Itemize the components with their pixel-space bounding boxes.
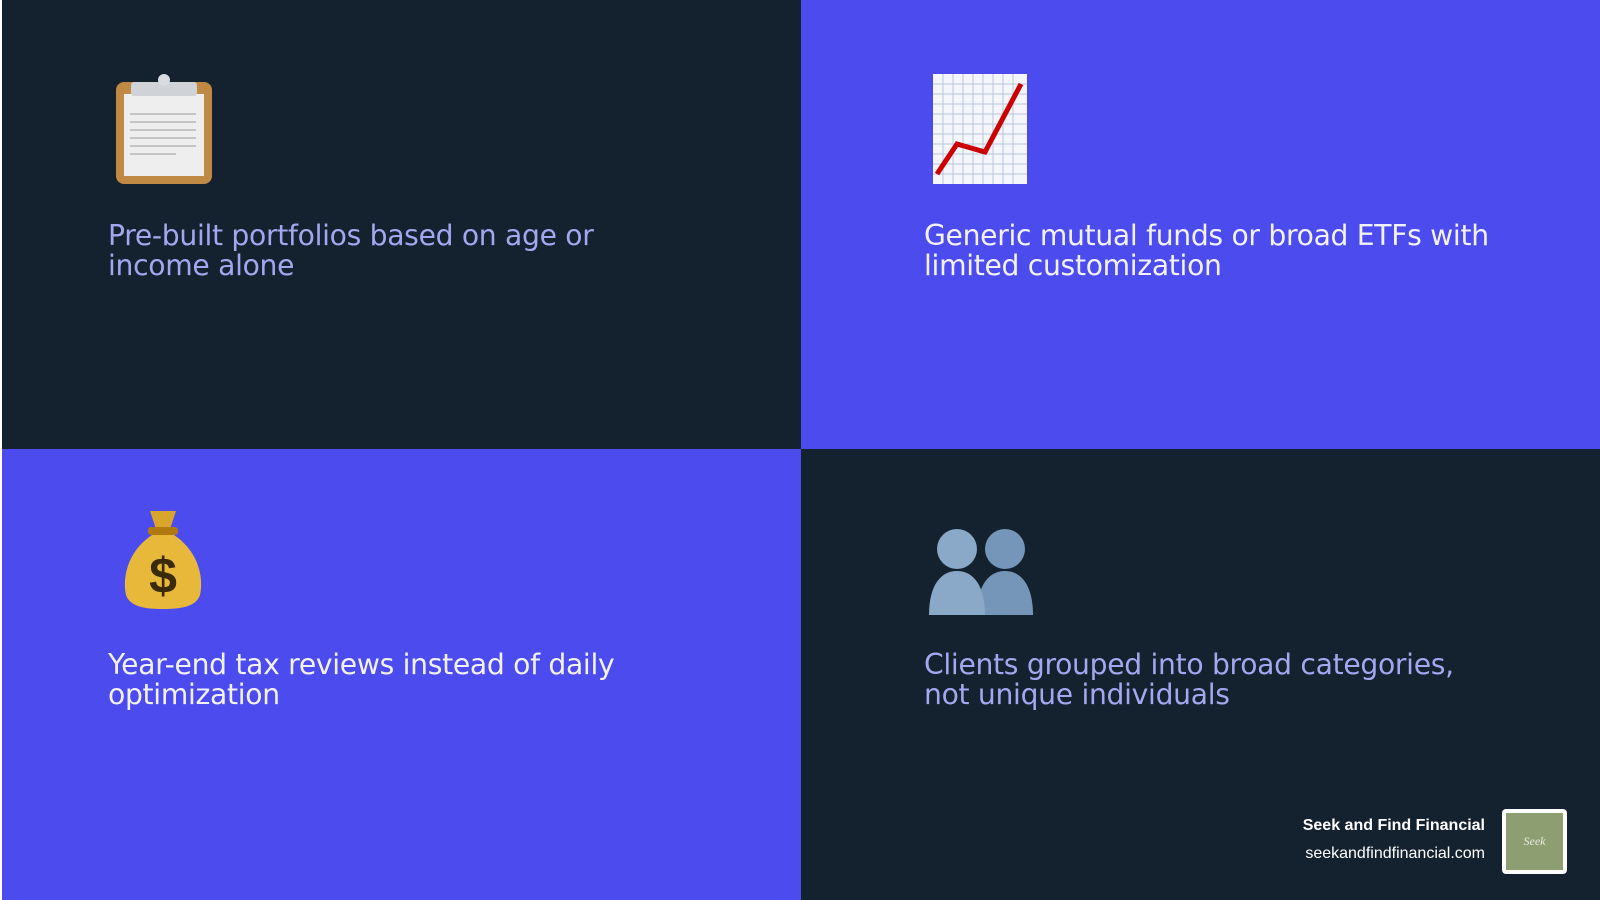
panel: pre-built portfolios — [2, 0, 801, 449]
text: clients grouped: Clients grouped into broad categories, not unique individuals — [924, 648, 1454, 711]
icon: chart — [933, 74, 1027, 184]
icon: silhouettes — [929, 529, 1033, 615]
brand block — [1303, 809, 1567, 874]
text: year-end tax reviews: Year-end tax reviews instead of daily optimization — [108, 648, 614, 711]
text: generic mutual funds: Generic mutual funds or broad ETFs with limited customization — [924, 219, 1489, 282]
panel: year-end tax reviews — [2, 449, 801, 900]
text: pre-built portfolios: Pre-built portfolios based on age or income alone — [108, 219, 594, 282]
panel: clients grouped — [801, 449, 1600, 900]
panel: generic mutual funds — [801, 0, 1600, 449]
icon: money bag — [124, 511, 202, 609]
logo: Seek — [1524, 834, 1545, 848]
logo — [1502, 809, 1567, 874]
brand name: Seek and Find Financial — [1303, 817, 1485, 834]
icon: clipboard — [116, 74, 212, 184]
brand url: seekandfindfinancial.com — [1305, 845, 1485, 862]
icon: money bag: $ — [149, 548, 177, 604]
